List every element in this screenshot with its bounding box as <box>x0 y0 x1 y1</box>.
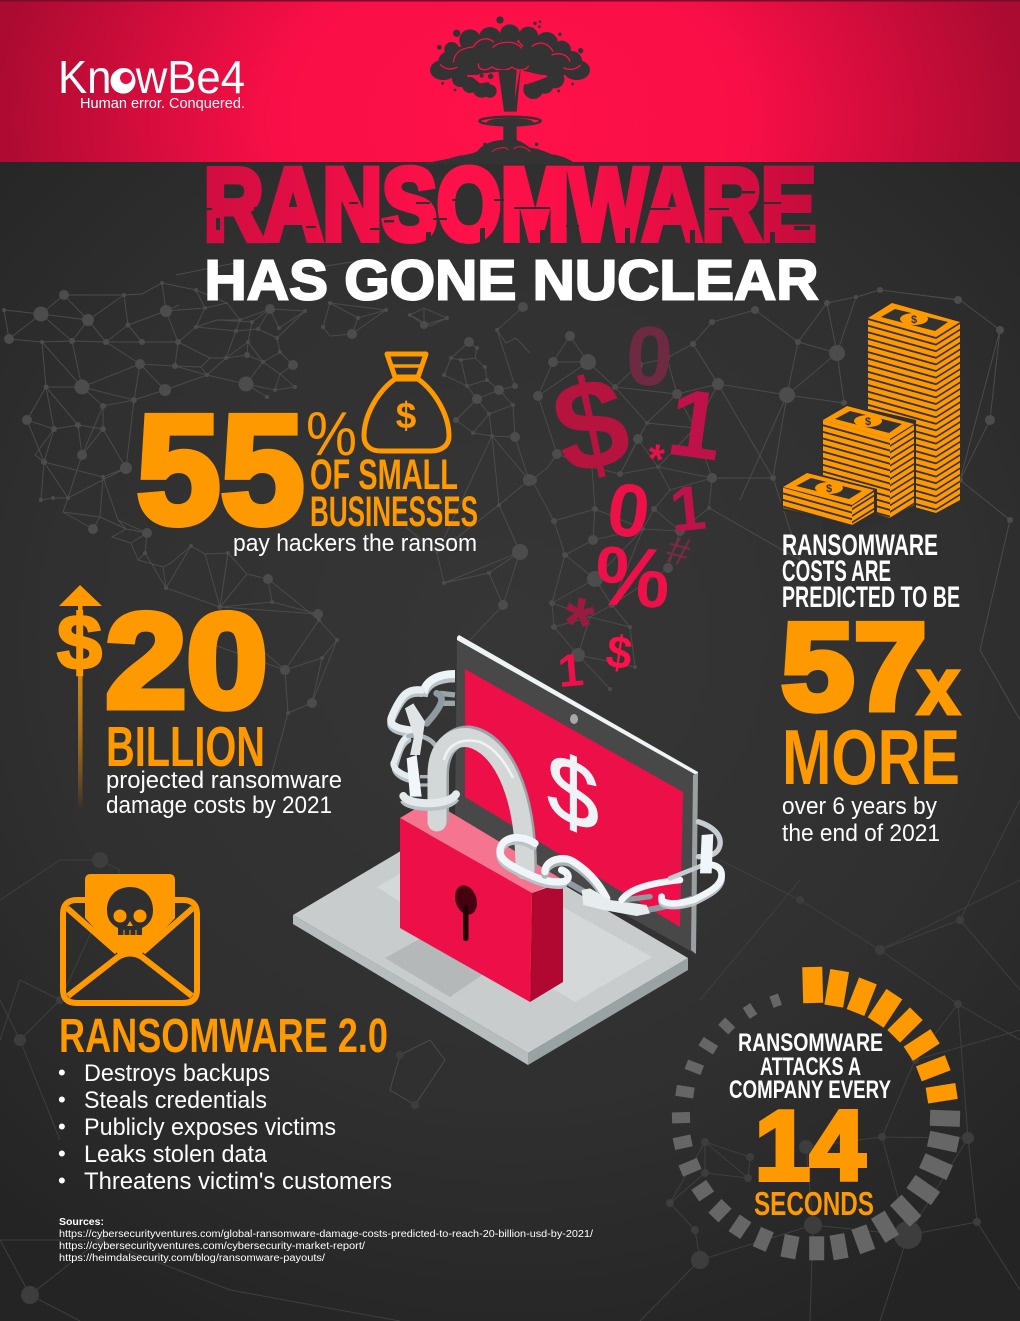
stat: $20 billion: $ <box>57 598 102 686</box>
laptop base <box>293 820 688 1065</box>
chain upper left <box>391 674 455 797</box>
icon: money bag <box>364 354 449 451</box>
icon: money bag: $ <box>396 395 417 436</box>
heading and list: ransomware 2.0: • <box>58 1060 66 1085</box>
medium stack: $ <box>865 416 871 428</box>
timer text: 14 <box>755 1090 865 1200</box>
floating symbols: $ <box>541 348 641 503</box>
heading and list: ransomware 2.0: • <box>58 1141 66 1166</box>
floating symbols <box>541 308 729 697</box>
heading and list: ransomware 2.0: RANSOMWARE 2.0 <box>59 1010 388 1063</box>
icon: skull envelope <box>63 874 197 1003</box>
big stack <box>868 303 960 513</box>
floating symbols: * <box>555 580 600 669</box>
stat: 57x more: the end of 2021 <box>782 820 940 847</box>
sources: https://cybersecurityventures.com/cybersecurity-market-report/ <box>59 1241 365 1252</box>
sources: https://cybersecurityventures.com/global-ransomware-damage-costs-predicted-to-reach-20-billion-usd-by-2021/ <box>59 1229 593 1240</box>
medium stack <box>821 404 916 540</box>
logo: KnowBe4: KnowBe4 <box>58 51 245 103</box>
padlock shackle <box>437 736 527 870</box>
remaining grey ticks <box>672 994 960 1260</box>
stat: $20 billion <box>57 587 342 819</box>
small stack: $ <box>826 483 832 495</box>
stat: 57x more: RANSOMWARE <box>782 529 938 562</box>
heading and list: ransomware 2.0: Publicly exposes victims <box>84 1114 336 1141</box>
timer text: ATTACKS A <box>760 1053 861 1081</box>
timer text <box>729 1029 891 1222</box>
title: HAS GONE NUCLEAR: HAS GONE NUCLEAR <box>204 248 819 312</box>
skull <box>107 887 153 936</box>
floating symbols: % <box>593 528 672 626</box>
stat: 55% of small businesses: % <box>306 400 357 469</box>
stat: 55% of small businesses: OF SMALL <box>310 451 458 499</box>
floating symbols: 1 <box>556 643 586 697</box>
logo: KnowBe4: Human error. Conquered. <box>80 95 245 112</box>
timer text: RANSOMWARE <box>738 1029 883 1057</box>
heading and list: ransomware 2.0 <box>58 1010 392 1195</box>
stat: $20 billion: BILLION <box>106 715 265 779</box>
heading and list: ransomware 2.0: Leaks stolen data <box>84 1141 268 1168</box>
icon: money stacks <box>781 303 960 540</box>
heading and list: ransomware 2.0: • <box>58 1114 66 1139</box>
stat: 55% of small businesses <box>136 383 478 557</box>
heading and list: ransomware 2.0: Steals credentials <box>84 1087 267 1114</box>
padlock body <box>400 800 563 1002</box>
stat: 57x more: MORE <box>782 713 960 801</box>
chain lower right <box>500 822 722 916</box>
laptop screen: $ <box>547 731 599 855</box>
heading and list: ransomware 2.0: • <box>58 1168 66 1193</box>
stat: 57x more: x <box>917 641 960 732</box>
title: RANSOMWARE: RANSOMWARE <box>204 148 816 262</box>
stat: $20 billion: damage costs by 2021 <box>106 792 332 819</box>
heading and list: ransomware 2.0: Destroys backups <box>84 1060 270 1087</box>
chart: 14 second timer ring <box>672 967 960 1260</box>
illustration: locked laptop <box>293 635 722 1065</box>
timer text: SECONDS <box>754 1185 874 1222</box>
floating symbols: * <box>643 434 668 483</box>
floating symbols: # <box>662 527 696 576</box>
floating symbols: 0 <box>624 308 675 404</box>
chain ring on shackle <box>403 794 456 807</box>
sources: Sources: <box>59 1217 104 1228</box>
floating symbols: $ <box>603 625 636 680</box>
laptop screen <box>455 635 698 954</box>
stat: 57x more: over 6 years by <box>782 793 937 820</box>
stat: 57x more: 57 <box>782 599 926 736</box>
small stack <box>781 471 877 528</box>
big stack: $ <box>911 314 917 326</box>
stat: 55% of small businesses: 55 <box>136 383 304 556</box>
floating symbols: 0 <box>602 466 655 555</box>
stat: 55% of small businesses: BUSINESSES <box>310 488 478 536</box>
heading and list: ransomware 2.0: Threatens victim's customers <box>84 1168 392 1195</box>
icon: up arrow with gradient stem <box>59 585 102 810</box>
sources: https://heimdalsecurity.com/blog/ransomware-payouts/ <box>59 1253 325 1264</box>
heading and list: ransomware 2.0: • <box>58 1087 66 1112</box>
sources <box>59 1217 593 1264</box>
stat: $20 billion: 20 <box>106 587 268 736</box>
header band <box>0 0 1020 162</box>
floating symbols: 1 <box>667 472 709 546</box>
icon: mushroom cloud <box>420 16 590 164</box>
stat: $20 billion: projected ransomware <box>106 767 342 794</box>
stat: 55% of small businesses: pay hackers the ransom <box>233 530 477 557</box>
stat: 57x more <box>782 529 960 847</box>
stat: 57x more: COSTS ARE <box>782 555 891 588</box>
elapsed orange ticks <box>802 967 958 1104</box>
timer text: COMPANY EVERY <box>729 1076 891 1104</box>
floating symbols: 1 <box>662 368 729 482</box>
